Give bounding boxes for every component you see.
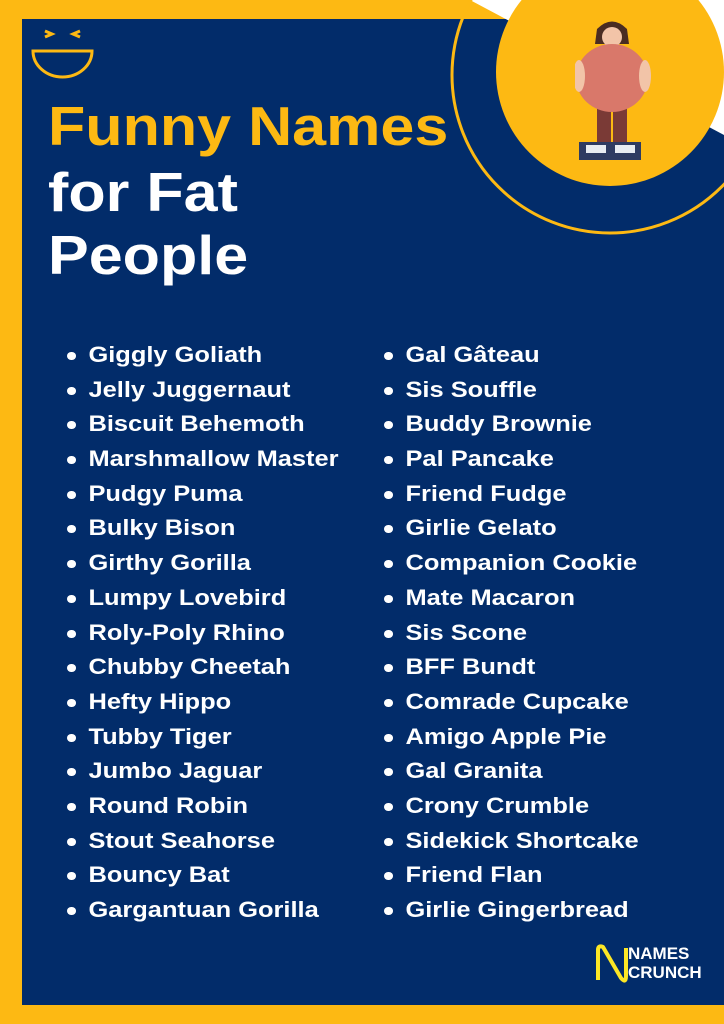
list: column 1: Jelly Juggernaut xyxy=(88,377,291,402)
list: column 1: Hefty Hippo xyxy=(88,689,231,714)
list: column 2: Mate Macaron xyxy=(405,585,575,610)
title: People xyxy=(48,224,248,286)
list: column 2: Girlie Gelato xyxy=(405,515,557,540)
list: column 2: Comrade Cupcake xyxy=(405,689,629,714)
logo: CRUNCH xyxy=(628,963,702,982)
list: column 2: Buddy Brownie xyxy=(405,411,592,436)
list: column 1: Round Robin xyxy=(88,793,248,818)
icon: person on scale xyxy=(575,22,651,160)
list: column 1: Gargantuan Gorilla xyxy=(88,897,319,922)
list: column 2: Gal Gâteau xyxy=(405,342,540,367)
list: column 2: Gal Granita xyxy=(405,758,543,783)
list: column 2: Crony Crumble xyxy=(405,793,589,818)
list: column 2: Girlie Gingerbread xyxy=(405,897,629,922)
list: column 2 xyxy=(384,342,639,922)
list: column 1: Giggly Goliath xyxy=(88,342,262,367)
list: column 2: Sis Scone xyxy=(405,620,527,644)
list: column 1: Roly-Poly Rhino xyxy=(88,620,285,644)
logo: NAMES xyxy=(628,944,689,963)
list: column 1: Jumbo Jaguar xyxy=(88,758,262,783)
list: column 1: Stout Seahorse xyxy=(88,828,275,853)
list: column 1: Bulky Bison xyxy=(88,515,235,540)
list: column 1: Bouncy Bat xyxy=(88,862,230,887)
list: column 1: Girthy Gorilla xyxy=(88,550,251,575)
list: column 1: Marshmallow Master xyxy=(88,446,339,471)
list: column 1: Chubby Cheetah xyxy=(88,654,290,679)
list: column 2: Amigo Apple Pie xyxy=(405,724,607,749)
list: column 1: Biscuit Behemoth xyxy=(88,411,305,436)
list: column 1 xyxy=(67,342,339,922)
title: for Fat xyxy=(48,161,238,223)
list: column 2: Companion Cookie xyxy=(405,550,637,575)
list: column 2: BFF Bundt xyxy=(405,654,535,679)
list: column 2: Sis Souffle xyxy=(405,377,537,402)
list: column 1: Tubby Tiger xyxy=(88,724,232,749)
list: column 2: Friend Fudge xyxy=(405,481,566,506)
list: column 1: Pudgy Puma xyxy=(88,481,242,506)
list: column 2: Friend Flan xyxy=(405,862,543,887)
list: column 2: Sidekick Shortcake xyxy=(405,828,639,853)
title: Funny Names xyxy=(48,95,448,157)
icon: smiley xyxy=(32,30,94,78)
title xyxy=(48,95,448,286)
logo xyxy=(596,944,702,983)
list: column 1: Lumpy Lovebird xyxy=(88,585,286,610)
list: column 2: Pal Pancake xyxy=(405,446,554,471)
